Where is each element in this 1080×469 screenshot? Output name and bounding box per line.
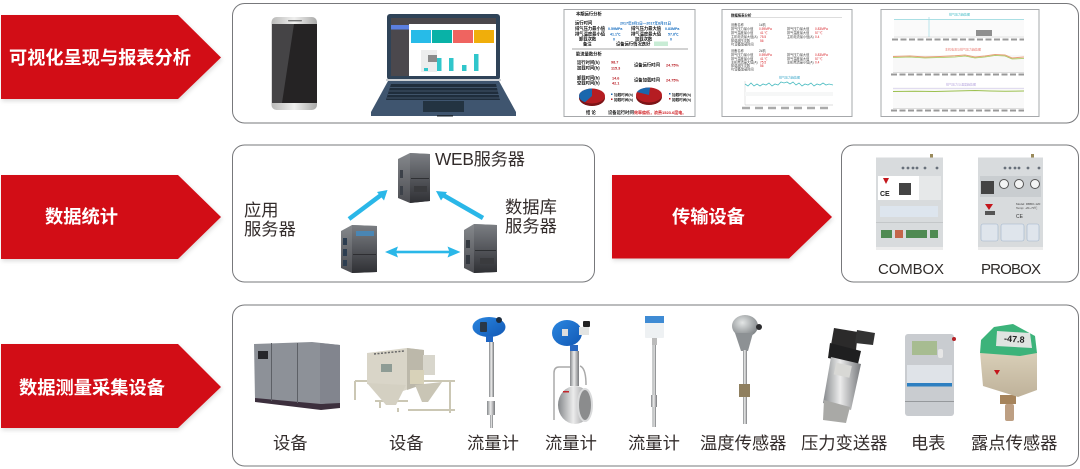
report: data table and trend: 0.4 (815, 35, 820, 39)
report: data table and trend: 卸载超压次数 (731, 38, 751, 43)
chart: trend middle: 主机电流与排气压力趋势图 (945, 46, 981, 52)
report: data table and trend: 41 ℃ (760, 31, 768, 35)
report: data table and trend: #1设备加载时间 (731, 42, 754, 46)
panel: servers (232, 145, 594, 282)
icon: laptop with dashboard (371, 14, 516, 116)
report: operation analysis: 115.3 (611, 66, 620, 70)
legend: pie legends: 加载时间(h) (614, 92, 634, 97)
report: data table and trend: 设备名称 (731, 48, 745, 53)
report: data table and trend: 排气温度最大值 (787, 56, 810, 61)
report: operation analysis: 14.6 (612, 76, 619, 80)
label: application server: 应用 (244, 200, 279, 220)
report: data table and trend: 排气压力最小值 (731, 26, 754, 31)
icon: insertion flow meter (645, 316, 664, 427)
icon: COMBOX device (876, 154, 943, 250)
report: data table and trend: 设备名称 (731, 22, 745, 27)
label: PROBOX: PROBOX (981, 261, 1041, 278)
icon: PROBOX device: Model: RBBO-120 (1016, 202, 1041, 206)
labels: equipment names (273, 433, 1057, 453)
report: operation analysis: 加载次数 (635, 36, 653, 42)
report: operation analysis: 排气压力最大值 (631, 25, 662, 32)
report: data table and trend: 75.5 (760, 35, 766, 39)
report: data table and trend: 41 ℃ (760, 57, 768, 61)
report: operation analysis: 设备加载时间 (634, 76, 660, 84)
report: operation analysis: 运行时间(h) (577, 59, 600, 66)
report: operation analysis: 98.7 (611, 60, 618, 64)
report: data table and trend: 56 (760, 64, 764, 68)
labels: equipment names: 压力变送器 (801, 433, 887, 453)
icon: dew point sensor (980, 324, 1037, 421)
report: operation analysis: 排气温度最小值 (575, 30, 606, 38)
report: operation analysis (564, 10, 695, 116)
chart: trend top: 排气压力趋势图 (949, 12, 970, 16)
icon: database server (464, 224, 497, 273)
report: data table and trend: 主机电流最大值(A) (731, 34, 758, 39)
report: operation analysis: 卸载时间(h) (577, 74, 600, 82)
chart: trend bottom: 排气压力与温度趋势图 (946, 82, 976, 86)
report: operation analysis: 0 (613, 38, 615, 42)
report: operation analysis: 本期运行分析 (576, 10, 602, 18)
arrow: data statistics: 数据统计 (45, 206, 118, 227)
report: operation analysis: 排气温度最大值 (631, 30, 662, 38)
report: operation analysis: 0.59MPa (608, 27, 623, 31)
report: operation analysis: 卸载次数 (579, 36, 597, 42)
labels: equipment names: 流量计 (467, 433, 519, 453)
report: data table and trend: 主机电流最小值(A) (787, 60, 814, 64)
report: operation analysis: 41.1℃ (610, 32, 621, 36)
report: data table and trend: 0.59MPa (759, 53, 772, 57)
report: data table and trend: 主机电流最小值(A) (787, 34, 814, 39)
labels: equipment names: 设备 (389, 433, 424, 453)
report: operation analysis: 结 论 (586, 109, 596, 116)
panel: transmission devices (842, 145, 1078, 282)
label: database server: 服务器 (505, 216, 557, 236)
labels: equipment names: 露点传感器 (971, 433, 1057, 453)
legend: pie legends: 卸载时间(h) (672, 97, 692, 102)
report: data table and trend: 排气压力最大值 (787, 26, 810, 31)
arrow: visualization and report analysis (1, 15, 221, 99)
icon: COMBOX device: CE (880, 191, 890, 198)
arrow: transmission equipment: 传输设备 (672, 206, 746, 227)
icon: smartphone (272, 17, 317, 110)
report: operation analysis: 设备运行时间 (608, 109, 634, 116)
report: operation analysis: 设备运行情况良好 (616, 40, 651, 48)
panel: measurement equipment (232, 305, 1078, 466)
report: three trend charts (881, 10, 1039, 116)
labels: equipment names: 流量计 (545, 433, 597, 453)
chart: report pie right (636, 87, 662, 105)
report: data table and trend: 数据报表分析 (731, 12, 752, 18)
report: data table and trend: 排气压力最大值 (787, 52, 810, 57)
report: data table and trend: 0.83MPa (815, 53, 828, 57)
icon: dew point sensor: -47.8 (1004, 333, 1025, 345)
report: data table and trend: 排气压力最小值 (731, 52, 754, 57)
icon: blasting machine (355, 348, 455, 413)
arrow: data measurement equipment (1, 344, 221, 428)
report: operation analysis: 24.75% (666, 64, 680, 68)
report: data table and trend: 排气温度最小值 (731, 56, 754, 61)
report: data table and trend: 57 ℃ (815, 57, 823, 61)
arrow: visualization and report analysis: 可视化呈现与报表分析 (9, 47, 191, 68)
icon: PROBOX device: Temp: -20~70℃ (1016, 206, 1037, 210)
report: data table and trend: 卸载超压次数 (731, 63, 751, 68)
labels: equipment names: 设备 (273, 433, 308, 453)
arrow: application to web (349, 190, 388, 219)
arrow: application and database exchange (385, 246, 460, 258)
icon: PROBOX device (978, 154, 1043, 250)
report: data table and trend: 2#机 (759, 48, 767, 53)
legend: pie legends: 卸载时间(h) (614, 97, 634, 102)
arrow: data statistics (1, 175, 221, 259)
report: operation analysis: 备注 (583, 40, 592, 48)
icon: web server (398, 153, 430, 203)
report: data table and trend: 56 (760, 39, 764, 43)
report: data table and trend: 0.83MPa (815, 27, 828, 31)
icon: pressure transmitter (823, 328, 875, 423)
label: COMBOX: COMBOX (878, 261, 944, 278)
report: operation analysis: 0.83MPa (665, 27, 680, 31)
report: data table and trend: 排气温度最小值 (731, 30, 754, 35)
legend: pie legends: 加载时间(h) (672, 92, 692, 97)
icon: thermal flow meter (472, 317, 506, 428)
label: application server: 服务器 (244, 219, 296, 239)
report: data table and trend: 75.5 (760, 60, 766, 64)
report: data table and trend: 主机电流最大值(A) (731, 60, 758, 64)
report: data table and trend: 0.4 (815, 60, 820, 64)
chart: trend bottom (891, 82, 1024, 110)
report: data table and trend: #2设备加载时间 (731, 66, 754, 72)
report: operation analysis: 加载时间(h) (577, 64, 600, 72)
report: operation analysis: 57.8℃ (668, 32, 679, 36)
report: operation analysis: 能流量数分析 (576, 50, 602, 58)
report: data table and trend: 0.59MPa (759, 27, 772, 31)
chart: report pie left (579, 88, 605, 106)
labels: equipment names: 电表 (911, 433, 946, 453)
labels: equipment names: 流量计 (628, 433, 680, 453)
report: operation analysis: 空载时间(h) (577, 80, 600, 86)
icon: vortex flow meter (552, 320, 592, 424)
panel: visualization and reports (232, 4, 1078, 123)
chart: trend top (892, 12, 1024, 40)
icon: application server (341, 225, 377, 273)
report: operation analysis: 排气压力最小值 (575, 25, 606, 32)
report: operation analysis: 0 (670, 38, 672, 42)
report: data table and trend: 1#机 (759, 22, 767, 27)
report: operation analysis: 设备运行时间 (634, 62, 660, 68)
arrow: data measurement equipment: 数据测量采集设备 (19, 377, 166, 398)
chart: exhaust pressure trend: 排气压力趋势图 (779, 74, 800, 80)
label: database server: 数据库 (505, 197, 557, 217)
report: data table and trend: 排气温度最大值 (787, 30, 810, 35)
report: operation analysis: 42.1 (612, 82, 619, 86)
icon: PROBOX device: CE (1016, 214, 1024, 220)
labels: equipment names: 温度传感器 (700, 433, 786, 453)
report: operation analysis: 24.75% (666, 78, 680, 82)
arrow: transmission equipment (612, 175, 832, 258)
legend: pie legends (611, 92, 692, 102)
label: web server: WEB服务器 (435, 149, 525, 169)
report: data table and trend (722, 10, 852, 116)
report: operation analysis: 效率偏低，浪费1523.6度电。 (634, 109, 686, 115)
icon: electricity meter (905, 334, 956, 416)
icon: temperature sensor (732, 315, 762, 424)
report: data table and trend: 57 ℃ (815, 31, 823, 35)
chart: trend middle (891, 46, 1024, 74)
report: operation analysis: 2017年8月1日—2017年8月31日 (620, 20, 672, 26)
report: operation analysis: 运行时间 (575, 20, 593, 26)
icon: air compressor (254, 342, 340, 410)
arrow: database to web (436, 191, 483, 218)
